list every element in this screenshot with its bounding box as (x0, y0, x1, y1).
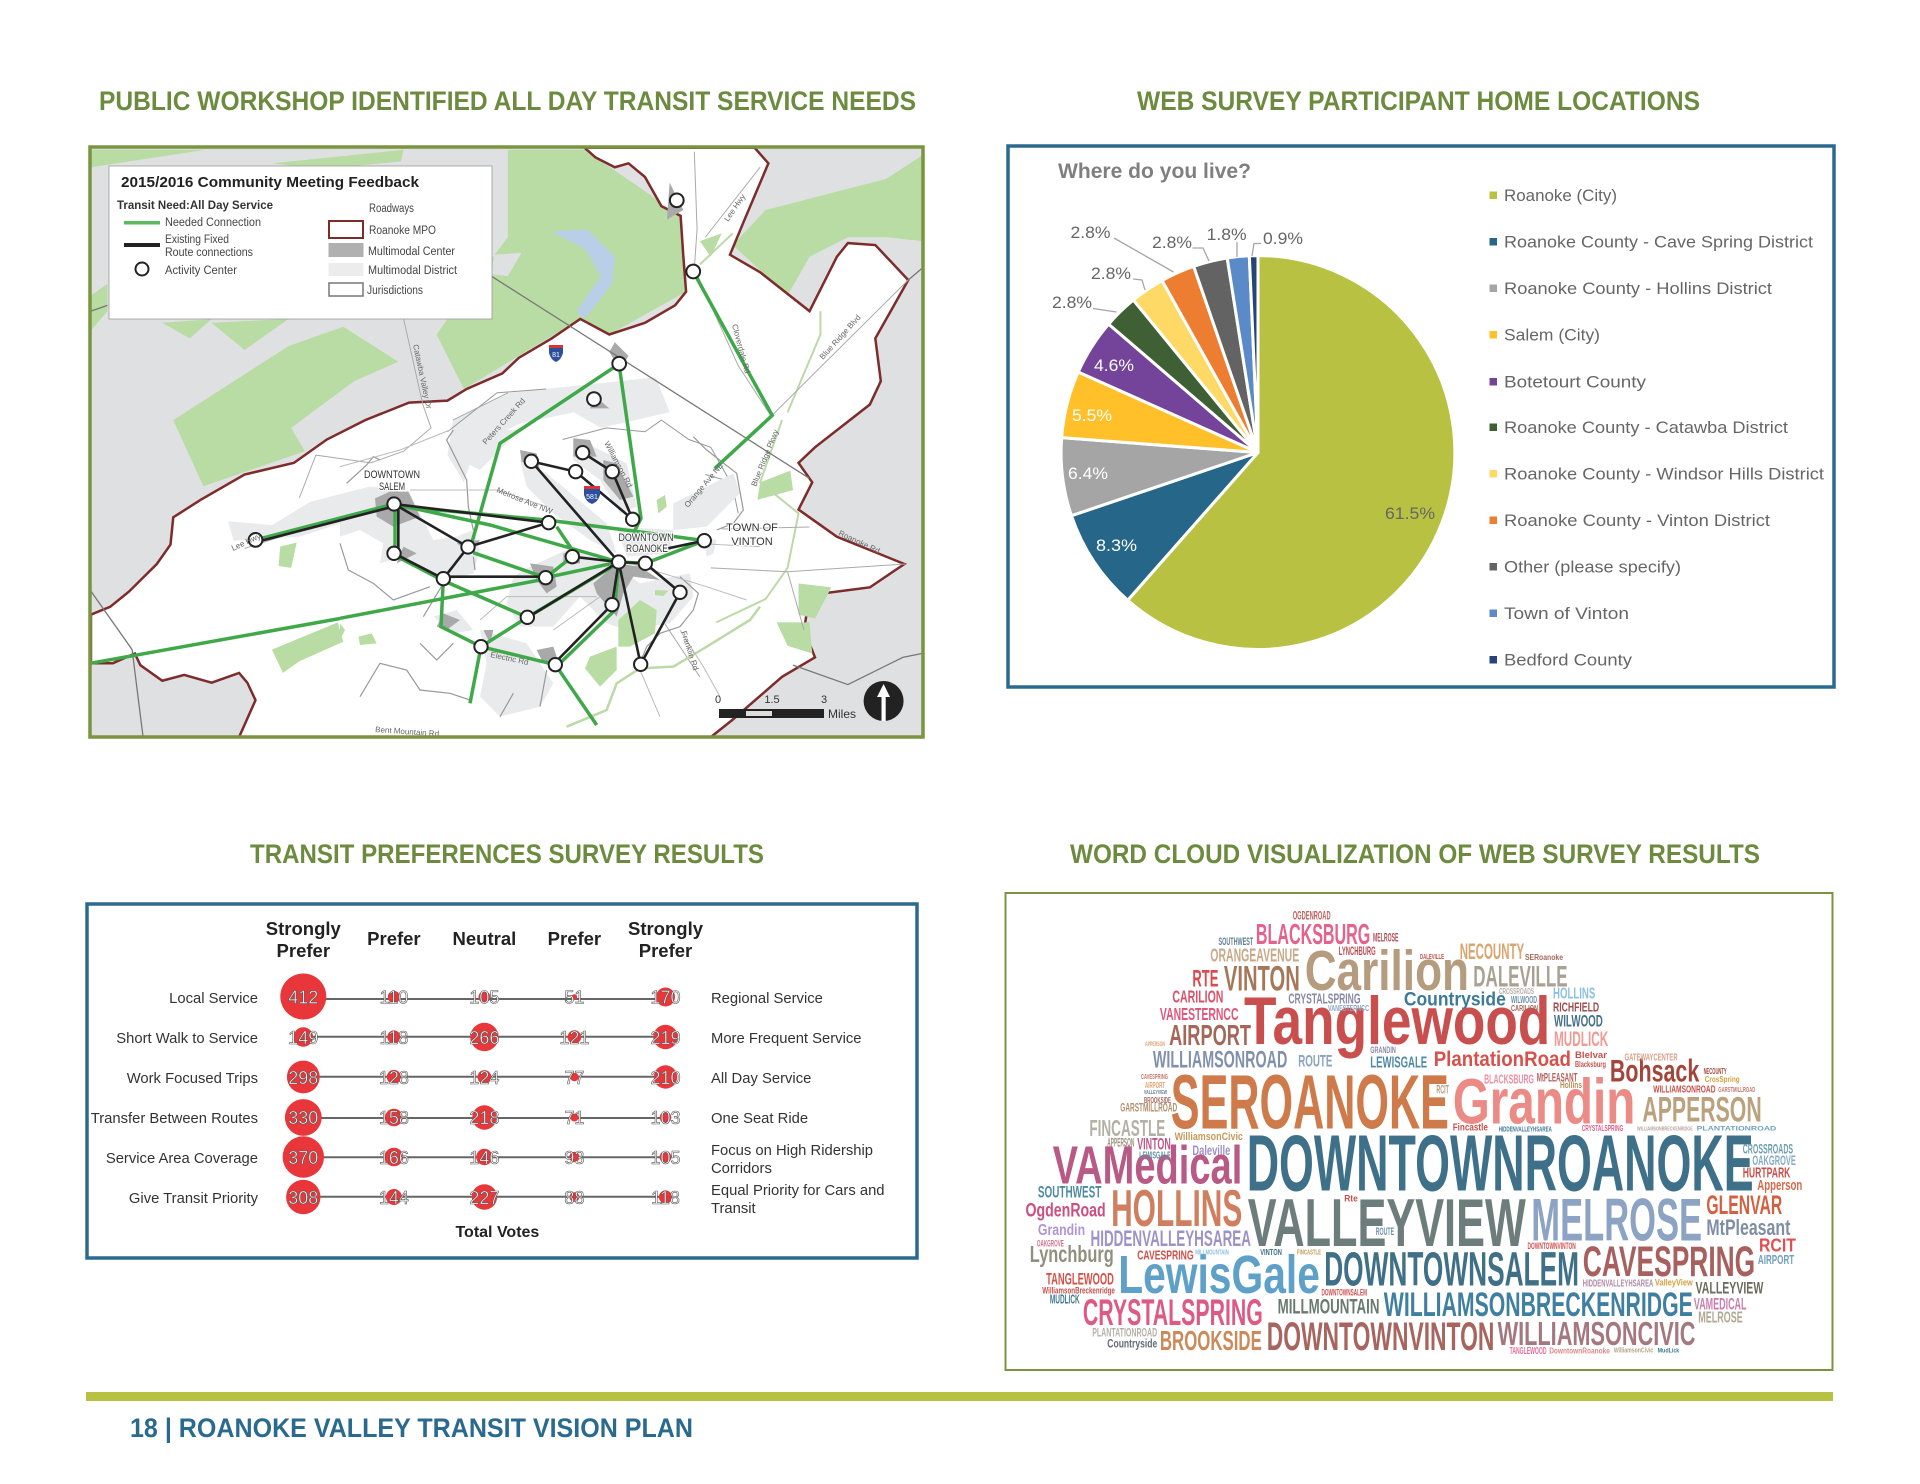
map scale bar (715, 696, 856, 718)
word cloud words: VALLEYVIEW (1248, 1186, 1526, 1261)
vote numbers: 128 (379, 1068, 409, 1088)
word cloud words: Fincastle (1453, 1123, 1488, 1134)
panel: transit preferences chart (87, 904, 917, 1258)
map place labels: SALEM (379, 481, 405, 493)
pie percentage labels: 8.3% (1096, 536, 1137, 555)
word cloud words: HOLLINS (1553, 985, 1595, 1002)
pie percentage labels: 5.5% (1072, 406, 1112, 425)
vote numbers: 308 (288, 1188, 318, 1208)
vote numbers: 88 (564, 1188, 584, 1208)
north arrow (864, 681, 904, 721)
pie legend: Roanoke County - Cave Spring District (1504, 232, 1813, 252)
existing route lines (256, 453, 704, 664)
map base (80, 140, 941, 751)
word cloud words: Countryside (1107, 1337, 1158, 1350)
word cloud words: CRYSTALSPRING (1288, 991, 1360, 1007)
word cloud words: Blacksburg (1575, 1060, 1606, 1069)
vote numbers: 219 (650, 1028, 681, 1048)
vote numbers: 149 (288, 1028, 318, 1048)
vote numbers: 370 (288, 1148, 318, 1168)
road labels: Catawba Valley Dr (411, 344, 434, 410)
left row labels: Short Walk to Service (116, 1031, 258, 1047)
word cloud words: Grandin (1453, 1065, 1635, 1137)
pie slices (1061, 256, 1455, 649)
activity centers (249, 193, 711, 671)
word cloud words: PLANTATIONROAD (1697, 1126, 1777, 1133)
map legend: Existing Fixed (165, 234, 229, 246)
word cloud words: Lynchburg (1030, 1241, 1114, 1267)
word cloud words: Bohsack (1610, 1053, 1700, 1089)
word cloud words: HIDDENVALLEYHSAREA (1499, 1127, 1552, 1134)
vote numbers: 210 (650, 1068, 681, 1088)
heading: public workshop map: PUBLIC WORKSHOP IDENTIFIED ALL DAY TRANSIT SERVICE NEEDS (99, 86, 916, 116)
vote numbers: 118 (380, 1028, 408, 1048)
left row labels: Transfer Between Routes (91, 1111, 258, 1127)
word cloud words: Daleville (1192, 1142, 1230, 1158)
word cloud words: WILLIAMSONROAD (1153, 1047, 1287, 1074)
map scale bar: 0 (715, 694, 721, 706)
word cloud words: NECOUNTY (1460, 939, 1524, 964)
road labels: Blue Ridge Pkwy (750, 428, 781, 488)
word cloud words: WILLIAMSONROAD (1653, 1084, 1716, 1095)
road labels: Electric Rd (490, 650, 529, 667)
word cloud words: CRYSTALSPRING (1582, 1123, 1624, 1133)
column headers: Prefer (277, 940, 330, 961)
word cloud words: Countryside (1404, 988, 1506, 1010)
map place labels (364, 469, 778, 555)
word cloud words: RCIT (1759, 1235, 1796, 1256)
pie legend: Botetourt County (1504, 372, 1647, 392)
pie legend: Other (please specify) (1504, 558, 1681, 576)
word cloud words: TANGLEWOOD (1046, 1270, 1114, 1288)
word cloud words: RICHFIELD (1553, 1000, 1599, 1015)
map legend (109, 166, 492, 319)
vote numbers: 144 (379, 1188, 409, 1208)
word cloud words: Hollins (1560, 1080, 1582, 1090)
word cloud words: CARILION (1511, 1004, 1538, 1013)
word cloud words: PLANTATIONROAD (1092, 1327, 1157, 1340)
left row labels: Give Transit Priority (129, 1191, 259, 1207)
right row labels: All Day Service (711, 1071, 811, 1087)
pie percentage labels: 4.6% (1094, 356, 1134, 375)
word cloud words: TANGLEWOOD (1510, 1346, 1546, 1357)
word cloud words: WILLIAMSONBRECKENRIDGE (1384, 1286, 1693, 1324)
road labels: Williamson Rd (602, 440, 634, 489)
word cloud words: DOWNTOWNVINTON (1267, 1314, 1494, 1359)
word cloud words: LEWISGALE (1139, 1150, 1171, 1161)
needed connection lines (91, 271, 772, 725)
vote numbers: 166 (379, 1148, 409, 1168)
word cloud words: DALEVILLE (1420, 954, 1444, 961)
word cloud words: MtPleasant (1706, 1215, 1791, 1240)
pie leader lines (1093, 238, 1261, 312)
word cloud words: GARSTMILLROAD (1120, 1102, 1177, 1115)
vote numbers (288, 988, 681, 1208)
pie legend: Town of Vinton (1504, 604, 1629, 623)
word cloud words: RTE (1192, 966, 1218, 993)
footer rule (86, 1392, 1833, 1401)
word cloud words: CROSSROADS (1743, 1140, 1793, 1156)
right row labels: Focus on High Ridership (711, 1143, 873, 1159)
map place labels: TOWN OF (726, 522, 778, 534)
vote numbers: 146 (469, 1148, 499, 1168)
word cloud words: DowntownRoanoke (1549, 1346, 1610, 1355)
road labels: Orange Ave NE (683, 461, 725, 509)
column headers: Strongly (628, 918, 704, 939)
left row labels: Service Area Coverage (106, 1151, 258, 1167)
word cloud words: MudLick (1658, 1347, 1680, 1354)
word cloud words: WilliamsonCivic (1614, 1346, 1653, 1355)
map central districts (340, 430, 760, 727)
word cloud words: DOWNTOWNSALEM (1324, 1243, 1579, 1297)
word cloud words: MELROSE (1373, 932, 1399, 945)
word cloud words: CROSSROADS (1499, 987, 1534, 996)
word cloud words: OgdenRoad (1026, 1201, 1106, 1222)
axis label: Total Votes (455, 1224, 539, 1241)
word cloud words: ROUTE (1298, 1053, 1333, 1071)
road labels: Melrose Ave NW (495, 486, 554, 516)
pie legend (1490, 186, 1824, 670)
pie percentage labels (1052, 223, 1435, 555)
word cloud words: LewisGale (1118, 1245, 1320, 1305)
word cloud words: NECOUNTY (1704, 1067, 1727, 1076)
map legend: Activity Center (165, 265, 237, 277)
pie legend: Salem (City) (1504, 326, 1600, 344)
word cloud words: GLENVAR (1706, 1190, 1782, 1220)
word cloud words: ValleyView (1655, 1278, 1694, 1288)
word cloud words: LEWISGALE (1370, 1055, 1427, 1072)
word cloud words: BROOKSIDE (1144, 1096, 1171, 1105)
word cloud words: VINTON (1224, 959, 1300, 999)
word cloud words: APPERSON (1145, 1042, 1165, 1048)
word cloud words: HURTPARK (1743, 1165, 1791, 1181)
pie percentage labels: 2.8% (1152, 233, 1192, 252)
word cloud words: VAMedical (1053, 1135, 1242, 1195)
interstate shields: 81 (552, 352, 560, 359)
map legend: Jurisdictions (367, 285, 423, 297)
word cloud words: CAVESPRING (1583, 1238, 1755, 1286)
vote numbers: 71 (564, 1108, 584, 1128)
vote numbers: 266 (469, 1028, 499, 1048)
road labels: Cloverdale Rd (730, 323, 752, 374)
word cloud words: MELROSE (1698, 1310, 1743, 1327)
pie percentage labels: 1.8% (1207, 225, 1247, 244)
right row labels: Corridors (711, 1161, 772, 1177)
word cloud words: BROOKSIDE (1160, 1325, 1262, 1356)
word cloud words: CARILION (1172, 987, 1223, 1007)
right row labels: One Seat Ride (711, 1111, 808, 1127)
map legend: 2015/2016 Community Meeting Feedback (121, 174, 420, 191)
word cloud words: VANESTERNCC (1328, 1004, 1369, 1013)
road labels: Lee Hwy (230, 532, 262, 553)
word cloud words: MELROSE (1531, 1187, 1702, 1254)
word cloud words: VINTON (1260, 1248, 1282, 1257)
word cloud words: WILLIAMSONCIVIC (1498, 1316, 1696, 1353)
map place labels: DOWNTOWN (364, 469, 420, 481)
pie percentage labels: 2.8% (1052, 293, 1092, 312)
word cloud words: VANESTERNCC (1160, 1004, 1239, 1024)
vote numbers: 158 (379, 1108, 409, 1128)
vote numbers: 103 (650, 1108, 681, 1128)
panel: word cloud (1006, 893, 1832, 1370)
word cloud words: Blelvar (1575, 1050, 1608, 1060)
vote numbers: 51 (564, 988, 584, 1008)
word cloud words: GRANDIN (1370, 1045, 1396, 1055)
map legend: Multimodal Center (368, 246, 455, 258)
word cloud words: SOUTHWEST (1038, 1182, 1102, 1201)
word cloud words: GARSTMILLROAD (1718, 1087, 1755, 1094)
right row labels: Regional Service (711, 991, 823, 1007)
vote numbers: 412 (288, 988, 318, 1008)
vote numbers: 124 (469, 1068, 499, 1088)
map place labels: ROANOKE (626, 543, 668, 555)
word cloud words: MILLMOUNTAIN (1278, 1295, 1380, 1318)
pie percentage labels: 6.4% (1068, 464, 1108, 483)
word cloud words: OAKGROVE (1752, 1152, 1796, 1168)
word cloud words: HIDDENVALLEYHSAREA (1090, 1226, 1251, 1251)
left row labels: Work Focused Trips (127, 1071, 258, 1087)
word cloud words: Tanglewood (1244, 983, 1550, 1059)
column headers: Prefer (639, 940, 692, 961)
word cloud words: BLACKSBURG (1484, 1071, 1534, 1086)
word cloud words: SERoanoke (1525, 953, 1563, 962)
interstate shields (549, 345, 600, 504)
word cloud words: AIRPORT (1758, 1253, 1794, 1267)
road labels: Franklin Rd (679, 630, 700, 672)
panel: pie chart (1008, 146, 1834, 687)
word cloud words: SEROANOKE (1171, 1059, 1449, 1145)
pie legend: Roanoke County - Windsor Hills District (1504, 464, 1824, 484)
word cloud words: MtPLEASANT (1537, 1072, 1577, 1085)
word cloud words: OAKGROVE (1037, 1239, 1064, 1249)
road labels: Blue Ridge Blvd (818, 313, 863, 361)
word cloud words: DOWNTOWNVINTON (1528, 1241, 1576, 1251)
road labels: Roanoke Rd (837, 529, 881, 556)
word cloud words: BLACKSBURG (1256, 919, 1370, 951)
vote numbers: 105 (469, 988, 499, 1008)
pie percentage labels: 61.5% (1385, 504, 1435, 523)
vote numbers: 93 (564, 1148, 584, 1168)
pie legend: Bedford County (1504, 650, 1633, 670)
pie legend: Roanoke County - Vinton District (1504, 511, 1770, 530)
footer title: 18 | ROANOKE VALLEY TRANSIT VISION PLAN (130, 1413, 693, 1443)
road labels: Peters Creek Rd (481, 396, 527, 446)
right row labels: Equal Priority for Cars and (711, 1183, 885, 1199)
heading: word cloud: WORD CLOUD VISUALIZATION OF WEB SURVEY RESULTS (1070, 839, 1760, 869)
map legend: Route connections (165, 247, 253, 259)
pie title: Where do you live? (1058, 160, 1251, 183)
map legend: Roadways (369, 203, 414, 215)
vote numbers: 227 (469, 1188, 499, 1208)
word cloud words: VINTON (1137, 1135, 1171, 1153)
vote numbers: 121 (559, 1028, 589, 1048)
word cloud words: HOLLINS (1111, 1180, 1242, 1238)
map legend: Roanoke MPO (369, 225, 436, 237)
map legend: Transit Need:All Day Service (117, 198, 273, 212)
map scale bar: 1.5 (764, 694, 780, 706)
word cloud words: CRYSTALSPRING (1083, 1292, 1263, 1333)
word cloud words: LYNCHBURG (1339, 945, 1376, 958)
vote numbers: 110 (380, 988, 408, 1008)
pie legend: Roanoke (City) (1504, 186, 1617, 205)
word cloud words: SOUTHWEST (1218, 936, 1253, 948)
column headers (266, 918, 704, 961)
pie legend: Roanoke County - Hollins District (1504, 279, 1772, 298)
panel: transit needs map (80, 140, 941, 751)
map scale bar: 3 (821, 694, 827, 706)
word cloud words: WilliamsonCivic (1175, 1131, 1243, 1143)
word cloud words: AIRPORT (1145, 1081, 1165, 1090)
word cloud words: WILLIAMSONBRECKENRIDGE (1637, 1127, 1693, 1133)
word cloud words: VALLEYVIEW (1144, 1090, 1168, 1096)
heading: web survey home locations: WEB SURVEY PARTICIPANT HOME LOCATIONS (1137, 86, 1700, 116)
word cloud words (1026, 909, 1802, 1359)
vote numbers: 298 (288, 1068, 318, 1088)
road labels (230, 192, 881, 738)
right row labels: Transit (711, 1201, 756, 1217)
map legend: Needed Connection (165, 217, 261, 229)
column headers: Neutral (453, 928, 516, 949)
word cloud words: PlantationRoad (1434, 1048, 1571, 1071)
word cloud words: WilliamsonBreckenridge (1042, 1285, 1115, 1295)
pie percentage labels: 2.8% (1091, 264, 1131, 283)
map place labels: VINTON (731, 536, 773, 548)
word cloud words: Rte (1344, 1194, 1358, 1204)
word cloud words: DOWNTOWNSALEM (1322, 1288, 1367, 1298)
word cloud words: APPERSON (1642, 1090, 1762, 1130)
word cloud words: GATEWAYCENTER (1624, 1053, 1678, 1064)
word cloud words: MILLMOUNTAIN (1195, 1249, 1229, 1256)
pie percentage labels: 0.9% (1263, 229, 1303, 248)
right row labels (711, 991, 885, 1217)
word cloud words: MUDLICK (1050, 1292, 1080, 1306)
word cloud words: CAVESPRING (1141, 1074, 1168, 1081)
pie percentage labels: 2.8% (1070, 223, 1110, 242)
vote numbers: 218 (469, 1108, 499, 1128)
road labels: Lee Hwy (722, 192, 747, 223)
word cloud words: RCIT (1436, 1083, 1449, 1096)
heading: transit preferences: TRANSIT PREFERENCES SURVEY RESULTS (250, 839, 764, 869)
left row labels (91, 991, 259, 1207)
column headers: Prefer (548, 928, 601, 949)
road labels: Bent Mountain Rd (375, 725, 439, 738)
vote numbers: 330 (288, 1108, 318, 1128)
word cloud words: FINCASTLE (1297, 1247, 1321, 1256)
interstate shields: 581 (586, 494, 598, 501)
word cloud words: CrosSpring (1705, 1075, 1740, 1084)
vote numbers: 105 (650, 1148, 681, 1168)
word cloud words: APPERSON (1107, 1137, 1134, 1150)
map scale bar: Miles (828, 707, 856, 721)
word cloud words: VALLEYVIEW (1696, 1278, 1764, 1297)
word cloud words: CAVESPRING (1137, 1247, 1194, 1262)
left row labels: Local Service (169, 991, 258, 1007)
word cloud words: WILWOOD (1511, 995, 1537, 1006)
word cloud words: Apperson (1757, 1177, 1802, 1194)
word cloud words: ORANGEAVENUE (1210, 945, 1299, 966)
word cloud words: Carilion (1305, 939, 1469, 1003)
word cloud words: WILWOOD (1554, 1013, 1603, 1031)
word cloud words: VAMEDICAL (1694, 1295, 1747, 1313)
bubbles (280, 974, 678, 1214)
word cloud words: MUDLICK (1554, 1027, 1609, 1051)
column headers: Prefer (367, 928, 421, 949)
word cloud words: HIDDENVALLEYHSAREA (1583, 1279, 1654, 1290)
word cloud words: FINCASTLE (1089, 1115, 1165, 1141)
word cloud words: OGDENROAD (1293, 909, 1331, 922)
pie legend: Roanoke County - Catawba District (1504, 418, 1788, 437)
vote numbers: 77 (564, 1068, 584, 1088)
word cloud words: Grandin (1038, 1222, 1085, 1239)
word cloud words: ROUTE (1376, 1226, 1394, 1238)
word cloud words: AIRPORT (1169, 1020, 1251, 1052)
word cloud words: DALEVILLE (1473, 961, 1568, 994)
vote numbers: 118 (651, 1188, 680, 1208)
vote numbers: 170 (650, 988, 681, 1008)
row lines (303, 999, 665, 1197)
column headers: Strongly (266, 918, 342, 939)
right row labels: More Frequent Service (711, 1031, 862, 1047)
map legend: Multimodal District (368, 265, 458, 277)
map place labels: DOWNTOWN (618, 532, 674, 544)
